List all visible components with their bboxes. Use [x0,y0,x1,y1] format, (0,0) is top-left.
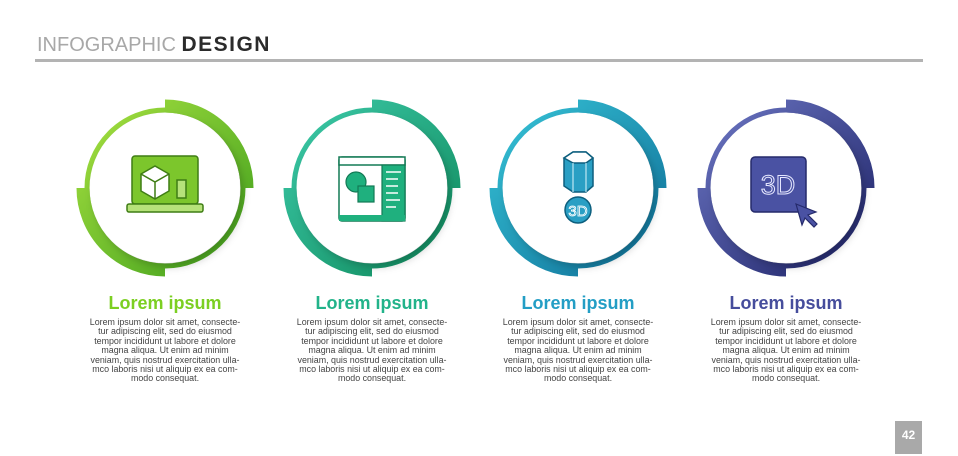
panel 3 text: magna aliqua. Ut enim ad minim [514,345,642,355]
panel 2 text: magna aliqua. Ut enim ad minim [308,345,436,355]
panel 2 text: modo consequat. [338,373,406,383]
panel 1 text: Lorem ipsum [108,293,222,313]
panel 2 text: veniam, quis nostrud exercitation ulla- [298,355,446,365]
panel 1 text: tempor incididunt ut labore et dolore [94,336,236,346]
panel 3 ring [496,106,660,270]
panel 2 text: mco laboris nisi ut aliquip ex ea com- [299,364,445,374]
panel 4 text: modo consequat. [752,373,820,383]
panel 2 text: tur adipiscing elit, sed do eiusmod [305,326,439,336]
panel 3 text: tempor incididunt ut labore et dolore [507,336,649,346]
panel 2 ring [290,106,454,270]
panel 4 text: tur adipiscing elit, sed do eiusmod [719,326,853,336]
panel 3 text: tur adipiscing elit, sed do eiusmod [511,326,645,336]
icon: design window [339,157,405,221]
panel 4 text: magna aliqua. Ut enim ad minim [722,345,850,355]
panel 1 text: modo consequat. [131,373,199,383]
panel 4 text [711,293,861,383]
icon: 3D hexagon prism medal [564,152,593,223]
icon: 3D hexagon prism medal: 3D [568,203,588,220]
panel 1 text: tur adipiscing elit, sed do eiusmod [98,326,232,336]
panel 3 text [503,293,653,383]
panel 2 text: Lorem ipsum [315,293,429,313]
panel 3 text: mco laboris nisi ut aliquip ex ea com- [505,364,651,374]
panel 1 text: veniam, quis nostrud exercitation ulla- [90,355,239,365]
icon: laptop with cube [127,156,203,212]
panel 1 text [90,293,240,383]
page number: 42 [902,428,915,442]
panel 4 text: veniam, quis nostrud exercitation ulla- [712,355,860,365]
panel 4 text: Lorem ipsum dolor sit amet, consecte- [711,317,861,327]
icon: 3D button with cursor [751,157,817,227]
icon: 3D button with cursor: 3D [761,170,795,200]
panel 2 text: tempor incididunt ut labore et dolore [301,336,443,346]
panel 1 ring [83,106,247,270]
panel 4 ring [704,106,868,270]
panel 3 text: modo consequat. [544,373,612,383]
panel 2 text: Lorem ipsum dolor sit amet, consecte- [297,317,447,327]
panel 1 text: magna aliqua. Ut enim ad minim [101,345,229,355]
panel 4 text: tempor incididunt ut labore et dolore [715,336,857,346]
title: INFOGRAPHIC DESIGN [37,33,271,56]
panel 3 text: Lorem ipsum [521,293,635,313]
panel 4 text: mco laboris nisi ut aliquip ex ea com- [713,364,859,374]
panel 1 text: mco laboris nisi ut aliquip ex ea com- [92,364,238,374]
panel 3 text: Lorem ipsum dolor sit amet, consecte- [503,317,653,327]
panel 3 text: veniam, quis nostrud exercitation ulla- [504,355,652,365]
panel 1 text: Lorem ipsum dolor sit amet, consecte- [90,317,240,327]
panel 4 text: Lorem ipsum [729,293,843,313]
page number [895,421,922,454]
panel 2 text [297,293,447,383]
